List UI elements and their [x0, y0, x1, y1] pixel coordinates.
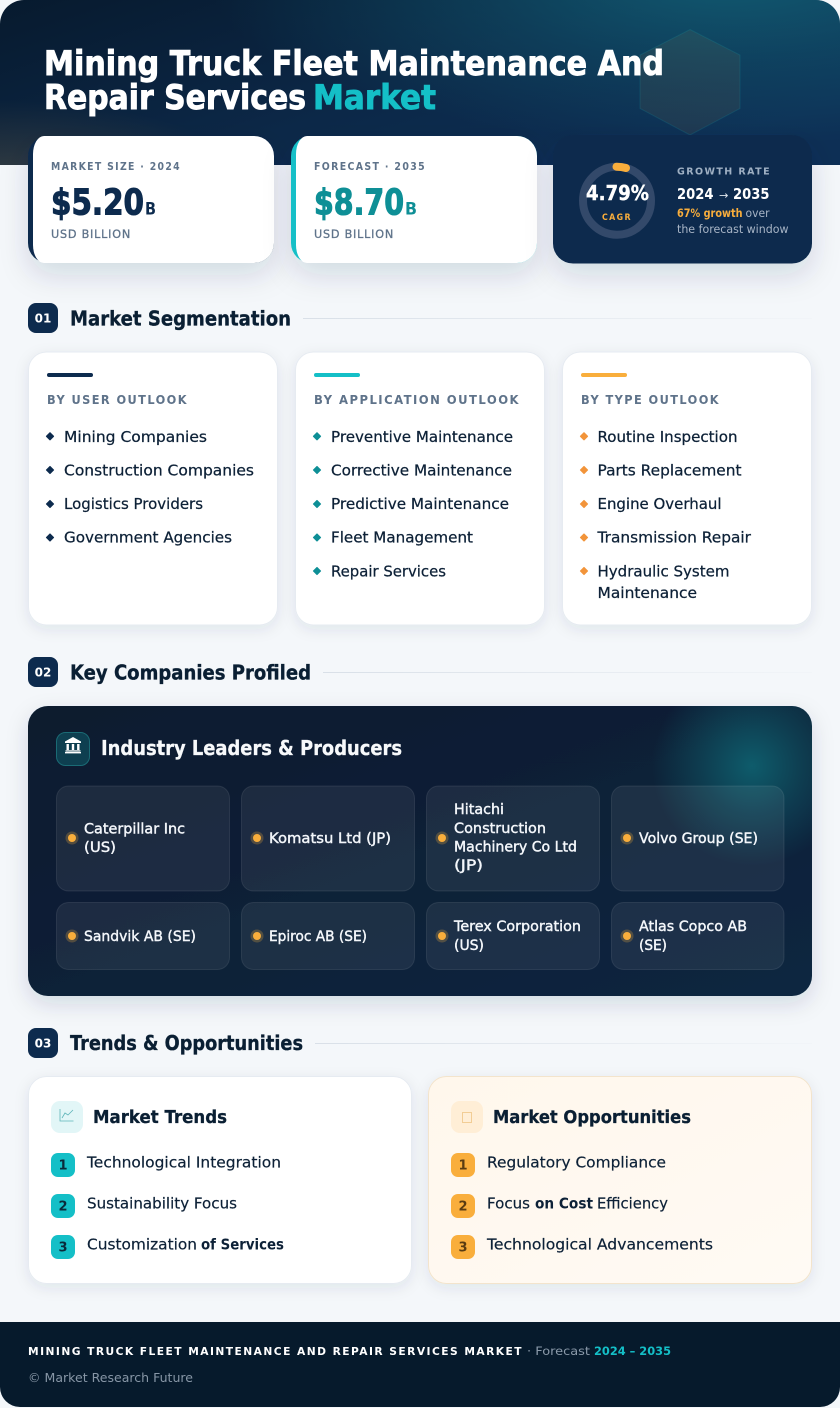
- panel: by application outlook: Predictive Maintenance: [331, 495, 509, 513]
- company: Atlas Copco: [612, 902, 784, 970]
- footer: 2024 – 2035: [594, 1344, 671, 1358]
- panel: by user outlook: Construction Companies: [64, 461, 254, 479]
- panel: industry leaders: Industry Leaders & Producers: [101, 736, 402, 760]
- icon: hexagon: [640, 30, 740, 135]
- stat card: growth rate: the forecast window: [677, 222, 788, 236]
- footer: · Forecast: [527, 1344, 591, 1358]
- stat card: forecast 2035: FORECAST · 2035: [314, 161, 426, 173]
- company: Komatsu: Komatsu Ltd (JP): [269, 831, 391, 847]
- stat card: growth rate: GROWTH RATE: [677, 166, 771, 178]
- company: Hitachi: (JP): [454, 858, 483, 874]
- panel: by type outlook: Hydraulic System: [598, 563, 730, 581]
- title: Market: [313, 78, 436, 118]
- company: Hitachi: Machinery Co Ltd: [454, 840, 577, 856]
- panel: market trends: Market Trends: [93, 1107, 227, 1128]
- panel: market trends: 2: [58, 1200, 68, 1214]
- icon: institution: [56, 732, 90, 766]
- stat card: market size 2024: USD BILLION: [51, 227, 131, 241]
- panel: market opportunities: Regulatory Compliance: [487, 1154, 666, 1172]
- section heading 03: Trends & Opportunities: [70, 1031, 303, 1055]
- panel: by type outlook: Engine Overhaul: [598, 495, 722, 513]
- panel: by user outlook: [28, 352, 278, 625]
- section heading 01: 01: [35, 312, 51, 326]
- panel: market opportunities: [428, 1076, 812, 1284]
- panel: by type outlook: Routine Inspection: [598, 428, 738, 446]
- panel: by user outlook: Mining Companies: [64, 428, 207, 446]
- panel: by user outlook: Logistics Providers: [64, 495, 203, 513]
- panel: market opportunities: Market Opportunities: [493, 1107, 691, 1128]
- company: Epiroc: [242, 902, 414, 970]
- stat card: forecast 2035: $8.70: [314, 182, 404, 224]
- company: Terex: (US): [454, 938, 484, 954]
- company: Volvo: [612, 786, 784, 891]
- chart: CAGR ring: 4.79%: [586, 181, 649, 205]
- section heading 01: [28, 303, 812, 333]
- section heading 02: [28, 657, 812, 687]
- company: Hitachi: Construction: [454, 821, 546, 837]
- panel: by user outlook: BY USER OUTLOOK: [47, 393, 188, 407]
- panel: market trends: 3: [58, 1240, 68, 1256]
- panel: by application outlook: Preventive Maintenance: [331, 428, 513, 446]
- company: Caterpillar: Caterpillar Inc: [84, 822, 185, 838]
- title: [44, 44, 664, 118]
- stat card: growth rate: 67% growth: [677, 206, 742, 220]
- title: Repair Services: [44, 78, 306, 118]
- icon: chart: [51, 1101, 83, 1133]
- stat card: market size 2024: MARKET SIZE · 2024: [51, 161, 181, 173]
- icon: opportunity placeholder: [451, 1101, 483, 1133]
- panel: by type outlook: BY TYPE OUTLOOK: [581, 393, 720, 407]
- panel: by user outlook: Government Agencies: [64, 529, 232, 547]
- chart: CAGR ring: [583, 167, 651, 235]
- panel: by application outlook: [296, 352, 544, 625]
- company: Atlas Copco: Atlas Copco AB: [639, 919, 747, 935]
- company: Komatsu: [242, 786, 414, 891]
- panel: by application outlook: Repair Services: [331, 563, 446, 581]
- panel: market opportunities: Focus: [487, 1194, 530, 1212]
- company: Volvo: Volvo Group (SE): [639, 831, 758, 847]
- panel: market opportunities: Technological Advancements: [486, 1236, 713, 1254]
- stat card: market size 2024: $5.20: [51, 182, 144, 224]
- company: Sandvik: Sandvik AB (SE): [84, 929, 196, 945]
- panel: by type outlook: [562, 352, 812, 625]
- company: Terex: Terex Corporation: [453, 919, 581, 935]
- panel: market trends: 1: [58, 1158, 68, 1174]
- company: Epiroc: Epiroc AB (SE): [269, 929, 367, 945]
- panel: by application outlook: Fleet Management: [331, 529, 473, 547]
- footer: © Market Research Future: [28, 1371, 193, 1385]
- title: Mining Truck Fleet Maintenance And: [44, 44, 664, 84]
- panel: by application outlook: Corrective Maintenance: [331, 461, 512, 479]
- panel: market trends: Sustainability Focus: [87, 1194, 237, 1212]
- section heading 03: 03: [35, 1036, 51, 1050]
- stat card: growth rate: over: [746, 206, 770, 220]
- panel: market trends: Technological Integration: [86, 1154, 281, 1172]
- section heading 02: Key Companies Profiled: [70, 660, 311, 684]
- company: Caterpillar: (US): [84, 840, 116, 856]
- panel: market opportunities: 1: [458, 1158, 468, 1174]
- chart: CAGR ring: CAGR: [602, 213, 632, 223]
- footer: MINING TRUCK FLEET MAINTENANCE AND REPAIR SERVICES MARKET: [28, 1345, 523, 1358]
- panel: by application outlook: BY APPLICATION OUTLOOK: [314, 393, 520, 407]
- panel: market trends: [28, 1076, 412, 1284]
- stat card: growth rate: 2024: [677, 185, 714, 203]
- panel: market trends: of Services: [201, 1236, 284, 1254]
- section heading 02: 02: [35, 666, 51, 680]
- panel: market opportunities: on Cost: [535, 1194, 593, 1212]
- stat card: growth rate: →: [719, 189, 728, 202]
- stat card: forecast 2035: [291, 136, 537, 263]
- stat card: market size 2024: B: [145, 200, 156, 218]
- stat card: market size 2024: [28, 136, 274, 263]
- company: Caterpillar: [56, 786, 230, 891]
- panel: market opportunities: 2: [458, 1200, 468, 1214]
- section heading 03: [28, 1028, 812, 1058]
- panel: market opportunities: Efficiency: [597, 1194, 668, 1212]
- panel: market opportunities: 3: [458, 1240, 468, 1256]
- stat card: growth rate: [553, 135, 812, 264]
- company: Atlas Copco: (SE): [639, 938, 667, 954]
- header band: [0, 0, 840, 165]
- company: Hitachi: [426, 786, 600, 891]
- stat card: forecast 2035: B: [405, 200, 417, 218]
- stat card: growth rate: 2035: [733, 185, 770, 203]
- company: Sandvik: [56, 902, 230, 970]
- panel: industry leaders: [28, 706, 812, 996]
- panel: by type outlook: Parts Replacement: [598, 461, 742, 479]
- panel: by type outlook: Maintenance: [598, 584, 697, 602]
- stat card: forecast 2035: USD BILLION: [314, 227, 394, 241]
- company: Terex: [426, 902, 600, 970]
- section heading 01: Market Segmentation: [70, 306, 291, 330]
- company: Hitachi: Hitachi: [454, 802, 504, 818]
- panel: by type outlook: Transmission Repair: [596, 529, 752, 547]
- panel: market trends: Customization: [87, 1236, 197, 1254]
- footer: [0, 1322, 840, 1407]
